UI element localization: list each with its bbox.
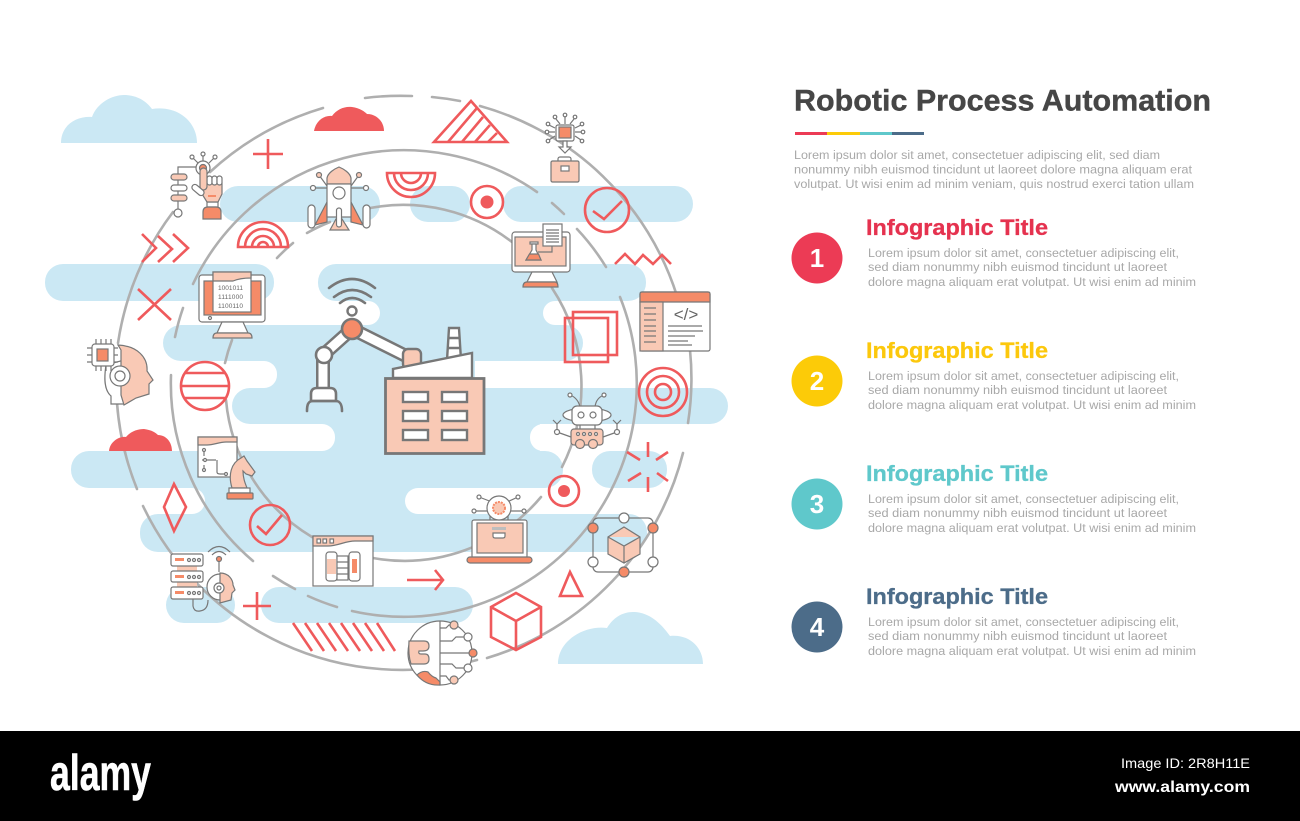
item 4 text: dolore magna aliquam erat volutpat. Ut wisi enim ad minim — [868, 644, 1196, 658]
number badge 4 — [792, 602, 842, 652]
item 2 text: Lorem ipsum dolor sit amet, consectetuer adipiscing elit, — [868, 369, 1179, 383]
shape: hatch lines — [293, 623, 395, 651]
item 2 text: dolore magna aliquam erat volutpat. Ut wisi enim ad minim — [868, 398, 1196, 412]
number badge 1 — [792, 232, 842, 284]
item 3 text — [868, 492, 1196, 535]
shape: red cloud top — [314, 107, 384, 131]
shape: target top — [471, 186, 503, 218]
item 3 text: Lorem ipsum dolor sit amet, consectetuer adipiscing elit, — [868, 492, 1179, 506]
shape: striped circle — [181, 362, 229, 410]
item 3 text: sed diam nonummy nibh euismod tincidunt ut laoreet — [868, 506, 1168, 520]
icon: robot arm and factory — [307, 279, 484, 454]
shape: target lower — [549, 476, 579, 506]
shape: red cube — [491, 593, 541, 650]
icon: hand pressing button — [171, 152, 222, 219]
shape: plus bottom — [243, 592, 271, 620]
item 1 text: Lorem ipsum dolor sit amet, consectetuer adipiscing elit, — [868, 246, 1179, 260]
shape: overlapping squares — [565, 312, 617, 362]
icon: monitor with binary code: 1001011 — [218, 285, 243, 292]
item 4 text — [868, 615, 1196, 658]
icon: cube network — [588, 513, 658, 577]
number badge 1: 1 — [810, 243, 824, 273]
footer logo: alamy — [50, 745, 151, 801]
shape: concentric target right — [639, 368, 687, 416]
shape: half rings top — [387, 173, 435, 197]
shape: zigzag — [615, 254, 671, 264]
item 1 heading: Infographic Title — [866, 215, 1048, 240]
illustration: robotic process automation ring diagram — [0, 95, 780, 685]
intro text — [794, 148, 1194, 191]
concentric ring arcs — [117, 96, 691, 670]
icon: ai head with chip — [87, 339, 153, 405]
item 1 text: dolore magna aliquam erat volutpat. Ut wisi enim ad minim — [868, 275, 1196, 289]
icon: monitor with binary code — [199, 272, 265, 338]
title: Robotic Process Automation — [794, 84, 1211, 118]
item 4 — [792, 584, 1196, 658]
item 1 text — [868, 246, 1196, 289]
item 1 — [792, 215, 1196, 289]
icon: code window: </> — [674, 305, 698, 324]
item 3 — [792, 461, 1196, 535]
item 2 text — [868, 369, 1196, 412]
item 4 text: sed diam nonummy nibh euismod tincidunt ut laoreet — [868, 629, 1168, 643]
shape: check circle lower — [250, 505, 290, 545]
icon: code window — [640, 292, 710, 351]
shape: chevrons — [142, 234, 188, 262]
item 3 text: dolore magna aliquam erat volutpat. Ut wisi enim ad minim — [868, 521, 1196, 535]
shape: cross — [138, 289, 171, 320]
icon: brain circuit — [408, 621, 477, 685]
shape: half rings left — [238, 222, 288, 247]
item 3 heading: Infographic Title — [866, 461, 1048, 486]
intro text: volutpat. Ut wisi enim ad minim veniam, quis nostrud exerci tation ullam — [794, 177, 1194, 191]
icon: chess knight strategy window — [198, 437, 255, 499]
item 1 text: sed diam nonummy nibh euismod tincidunt ut laoreet — [868, 260, 1168, 274]
white cut-outs between pills — [0, 301, 780, 514]
icon: monitor with flask and document — [512, 224, 570, 287]
shape: hatched triangle — [434, 101, 507, 142]
item 2 text: sed diam nonummy nibh euismod tincidunt ut laoreet — [868, 383, 1168, 397]
icon: server and head with headset — [171, 546, 235, 611]
item 2 heading: Infographic Title — [866, 338, 1048, 363]
shape: triangle — [560, 572, 582, 596]
number badge 2: 2 — [810, 366, 824, 396]
icon: robot on wheels — [553, 393, 621, 448]
cloud: top left — [61, 95, 197, 143]
shape: plus top — [253, 139, 283, 169]
icon: laptop with lightbulb — [467, 495, 532, 563]
item 2 — [792, 338, 1196, 412]
cloud: bottom right — [558, 612, 703, 664]
shape: check circle top right — [585, 188, 629, 232]
footer bar — [0, 731, 1300, 821]
number badge 3 — [792, 478, 842, 530]
icon: monitor with binary code: 1100110 — [218, 303, 243, 310]
shape: arrow — [407, 570, 443, 590]
icon: rocket — [308, 167, 370, 230]
shape: burst — [627, 442, 668, 492]
footer url: www.alamy.com — [1114, 779, 1250, 796]
shape: diamond — [164, 484, 186, 531]
item 4 heading: Infographic Title — [866, 584, 1048, 609]
intro text: nonummy nibh euismod tincidunt ut laoreet dolore magna aliquam erat — [794, 162, 1193, 176]
footer image id: Image ID: 2R8H11E — [1121, 755, 1250, 771]
colour bar divider — [795, 132, 924, 135]
icon: cpu and briefcase — [545, 113, 585, 182]
shape: red cloud left — [109, 429, 172, 451]
number badge 2 — [792, 356, 842, 406]
intro text: Lorem ipsum dolor sit amet, consectetuer adipiscing elit, sed diam — [794, 148, 1160, 162]
background pills — [45, 186, 728, 623]
icon: monitor with binary code: 1111000 — [218, 294, 243, 301]
number badge 4: 4 — [810, 612, 825, 642]
icon: app window with sliders — [313, 536, 373, 586]
number badge 3: 3 — [810, 489, 824, 519]
item 4 text: Lorem ipsum dolor sit amet, consectetuer adipiscing elit, — [868, 615, 1179, 629]
